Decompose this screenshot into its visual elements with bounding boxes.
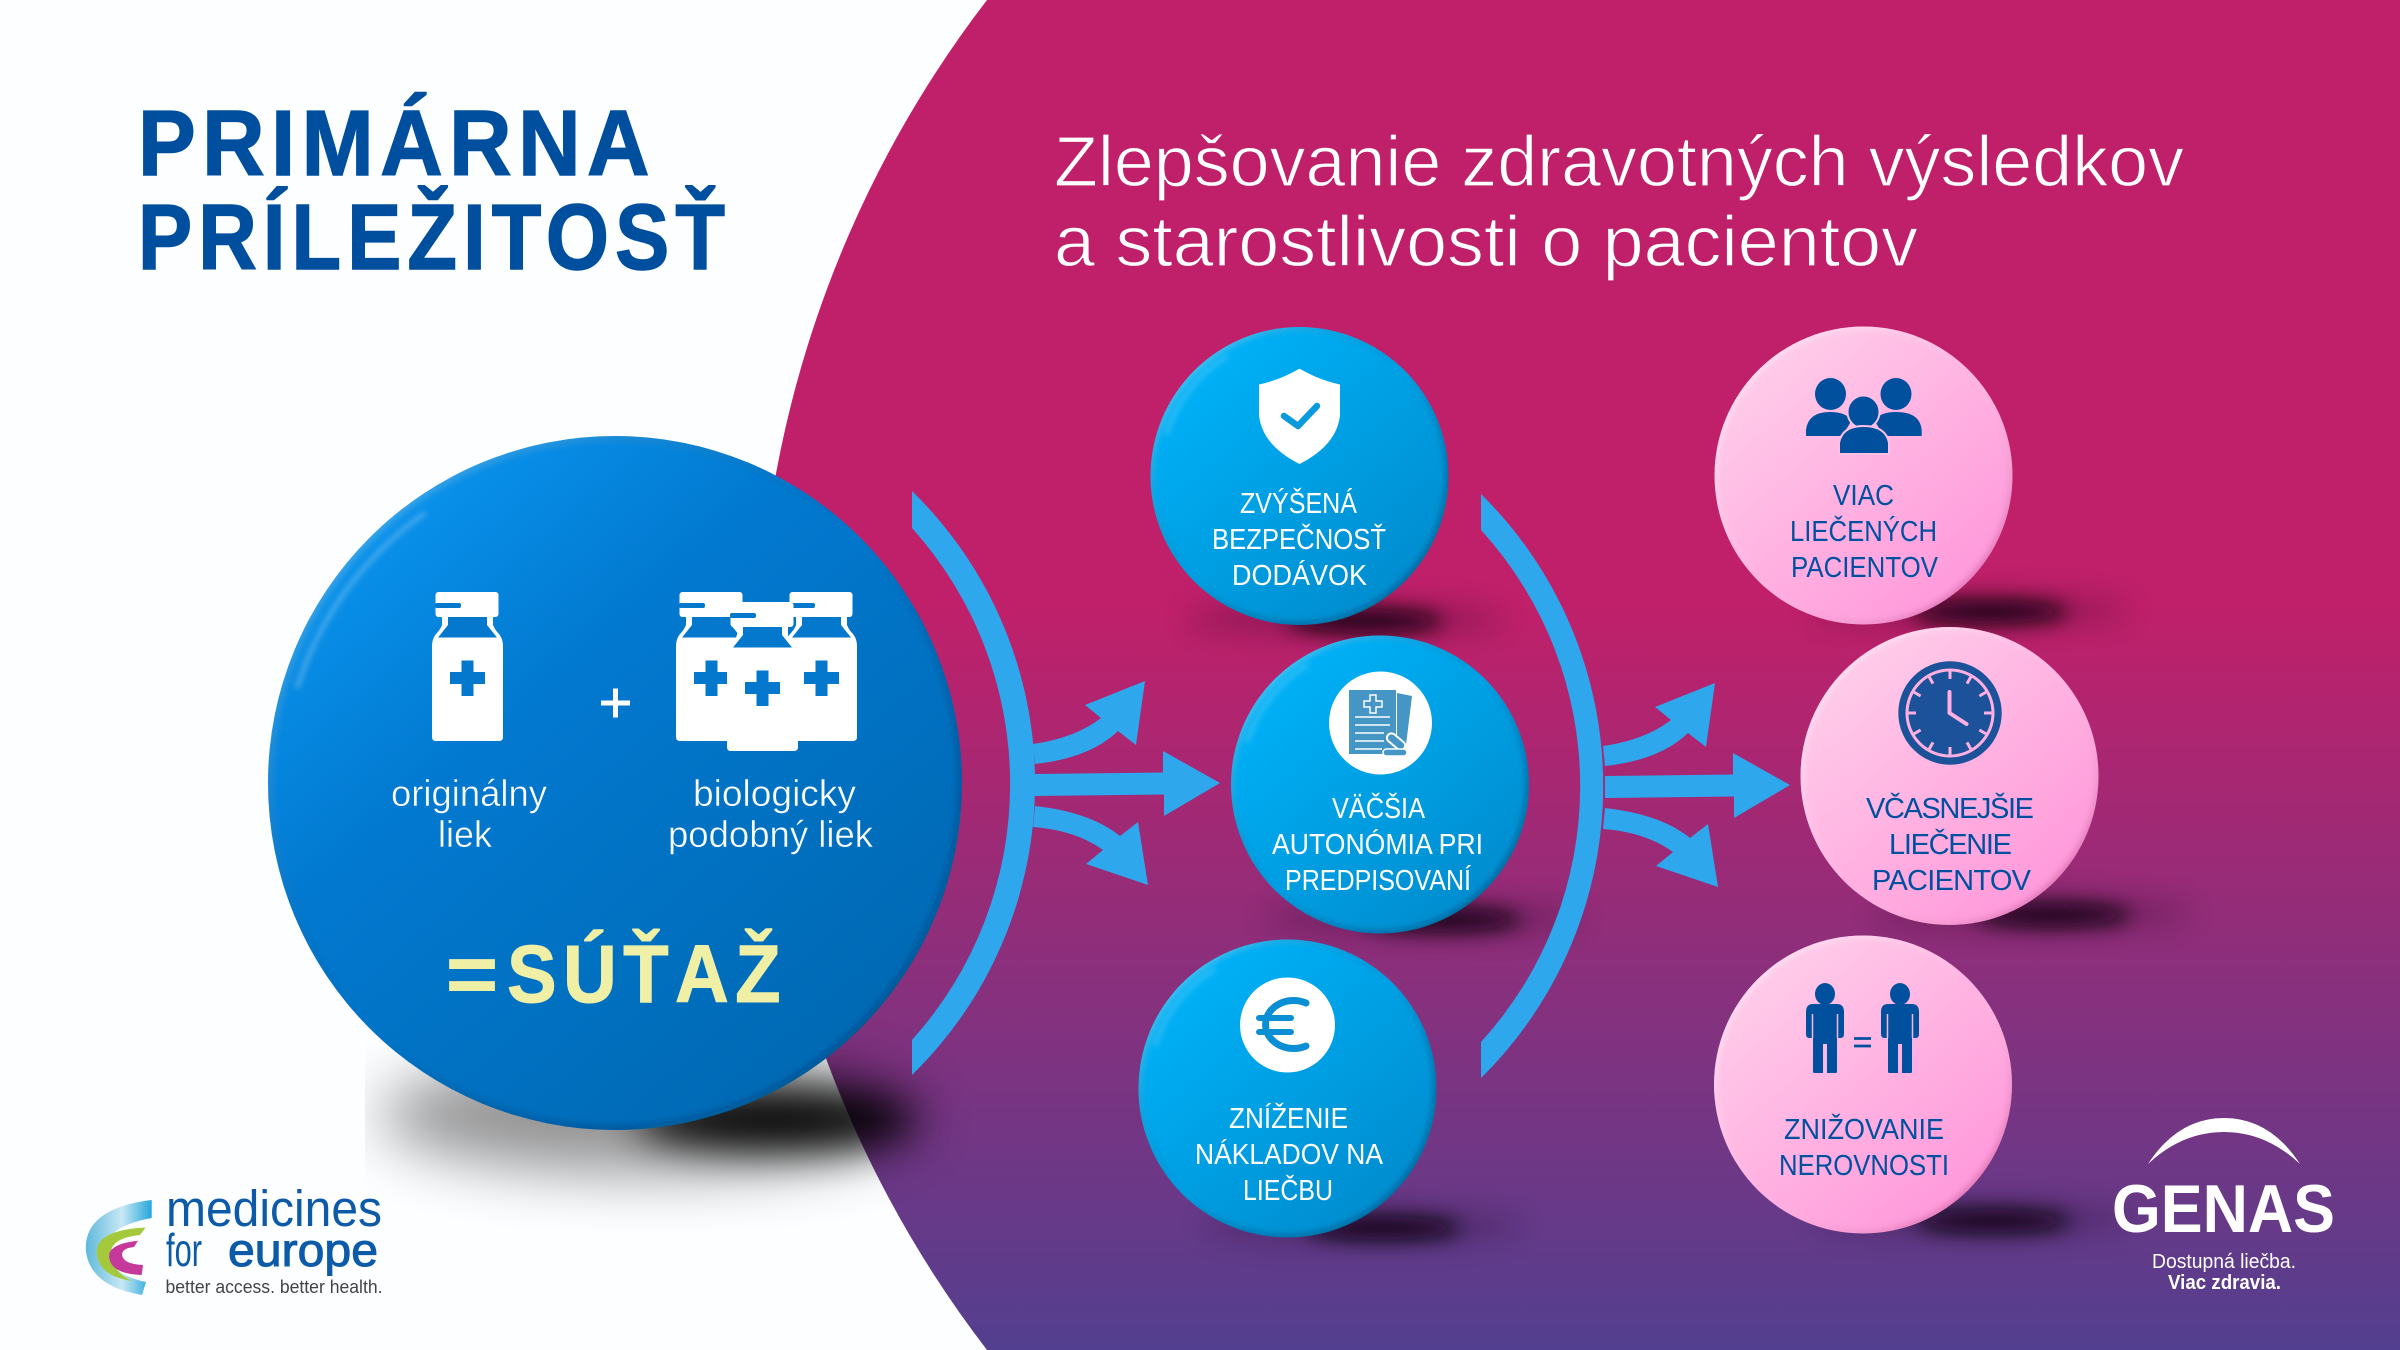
- arc: second bracket: [1481, 494, 1603, 1078]
- disc shadows: [380, 594, 2193, 1242]
- label: NÁKLADOV NA: [1195, 1138, 1384, 1171]
- magenta to purple curved background panel: [758, 0, 2400, 1350]
- disc: [1138, 940, 1436, 1238]
- logo mark: [86, 1200, 152, 1295]
- subtitle heading: [1054, 123, 2184, 282]
- disc: [1231, 636, 1529, 934]
- logo: GENAS: [2112, 1118, 2335, 1294]
- label: PREDPISOVANÍ: [1285, 864, 1472, 897]
- icon: group of patients: [1806, 378, 1922, 454]
- wordmark: for: [166, 1224, 202, 1276]
- plus sign: [601, 688, 630, 718]
- disc: [1714, 326, 2012, 624]
- label: equals competition: =: [446, 929, 498, 1020]
- label: PACIENTOV: [1791, 552, 1939, 584]
- icon: clock: [1898, 661, 2002, 765]
- label: ZNIŽOVANIE: [1784, 1113, 1944, 1146]
- panel: increased supply security: [1150, 327, 1448, 625]
- label: biosimilar medicine: [668, 773, 873, 855]
- label: [1212, 486, 1386, 592]
- label: original medicine: originálny: [391, 773, 547, 814]
- wordmark: [166, 1180, 382, 1276]
- label: LIEČBU: [1243, 1173, 1333, 1207]
- wordmark: GENAS: [2112, 1171, 2335, 1247]
- icon: original medicine vial: [432, 592, 503, 741]
- label: LIEČENIE: [1889, 827, 2012, 861]
- icon: biosimilar medicine vials: [676, 592, 857, 751]
- label: [1272, 791, 1483, 897]
- subtitle heading: a starostlivosti o pacientov: [1054, 203, 1919, 282]
- panel: greater prescribing autonomy: [1231, 636, 1529, 934]
- label: NEROVNOSTI: [1779, 1150, 1949, 1182]
- panel: more treated patients: [1714, 326, 2012, 624]
- arc: first bracket: [912, 491, 1035, 1075]
- label: ZNÍŽENIE: [1229, 1102, 1348, 1135]
- icon: two people equal: [1806, 983, 1919, 1073]
- title: PRIMÁRNA: [138, 91, 656, 195]
- label: VČASNEJŠIE: [1866, 791, 2034, 825]
- wordmark: medicines: [166, 1180, 382, 1237]
- icon: prescription and pills: [1329, 672, 1432, 774]
- logo: medicines for europe: [86, 1180, 382, 1297]
- panel: reduced treatment costs: [1138, 940, 1436, 1238]
- disc: [1800, 627, 2098, 925]
- label: equals competition: SÚŤAŽ: [507, 928, 787, 1020]
- arrows: from benefits to outcomes: [1603, 683, 1790, 887]
- icon: shield with check: [1259, 369, 1340, 464]
- label: DODÁVOK: [1232, 559, 1368, 592]
- label: [1195, 1102, 1384, 1207]
- label: [1866, 791, 2034, 897]
- large disc surface: [268, 436, 962, 1130]
- subtitle heading: Zlepšovanie zdravotných výsledkov: [1054, 123, 2184, 202]
- panel: reducing inequalities: [1714, 936, 2012, 1234]
- arrows: from disc to benefits: [1033, 681, 1220, 885]
- label: biosimilar medicine: biologicky: [693, 773, 856, 814]
- label: ZVÝŠENÁ: [1240, 486, 1358, 520]
- tagline: better access. better health.: [166, 1276, 382, 1297]
- label: [1790, 480, 1939, 584]
- wordmark: europe: [228, 1224, 378, 1276]
- title: PRÍLEŽITOSŤ: [138, 185, 731, 289]
- tagline bold: Viac zdravia.: [2168, 1272, 2281, 1294]
- panel: large blue competition disc: [268, 436, 962, 1130]
- label: PACIENTOV: [1872, 865, 2032, 897]
- label: original medicine: liek: [438, 814, 492, 855]
- icon: euro: [1240, 978, 1335, 1072]
- label: BEZPEČNOSŤ: [1212, 522, 1386, 556]
- disc: [1714, 936, 2012, 1234]
- label: [1779, 1113, 1949, 1182]
- disc: [1150, 327, 1448, 625]
- label: VIAC: [1833, 480, 1894, 512]
- tagline: Dostupná liečba.: [2152, 1251, 2296, 1273]
- logo arc: [2148, 1118, 2300, 1164]
- label: original medicine: [391, 773, 547, 855]
- label: AUTONÓMIA PRI: [1272, 828, 1483, 861]
- label: VÄČŠIA: [1332, 791, 1426, 825]
- title: [138, 91, 731, 289]
- label: biosimilar medicine: podobný liek: [668, 814, 873, 855]
- label: LIEČENÝCH: [1790, 514, 1937, 548]
- panel: earlier patient treatment: [1800, 627, 2098, 925]
